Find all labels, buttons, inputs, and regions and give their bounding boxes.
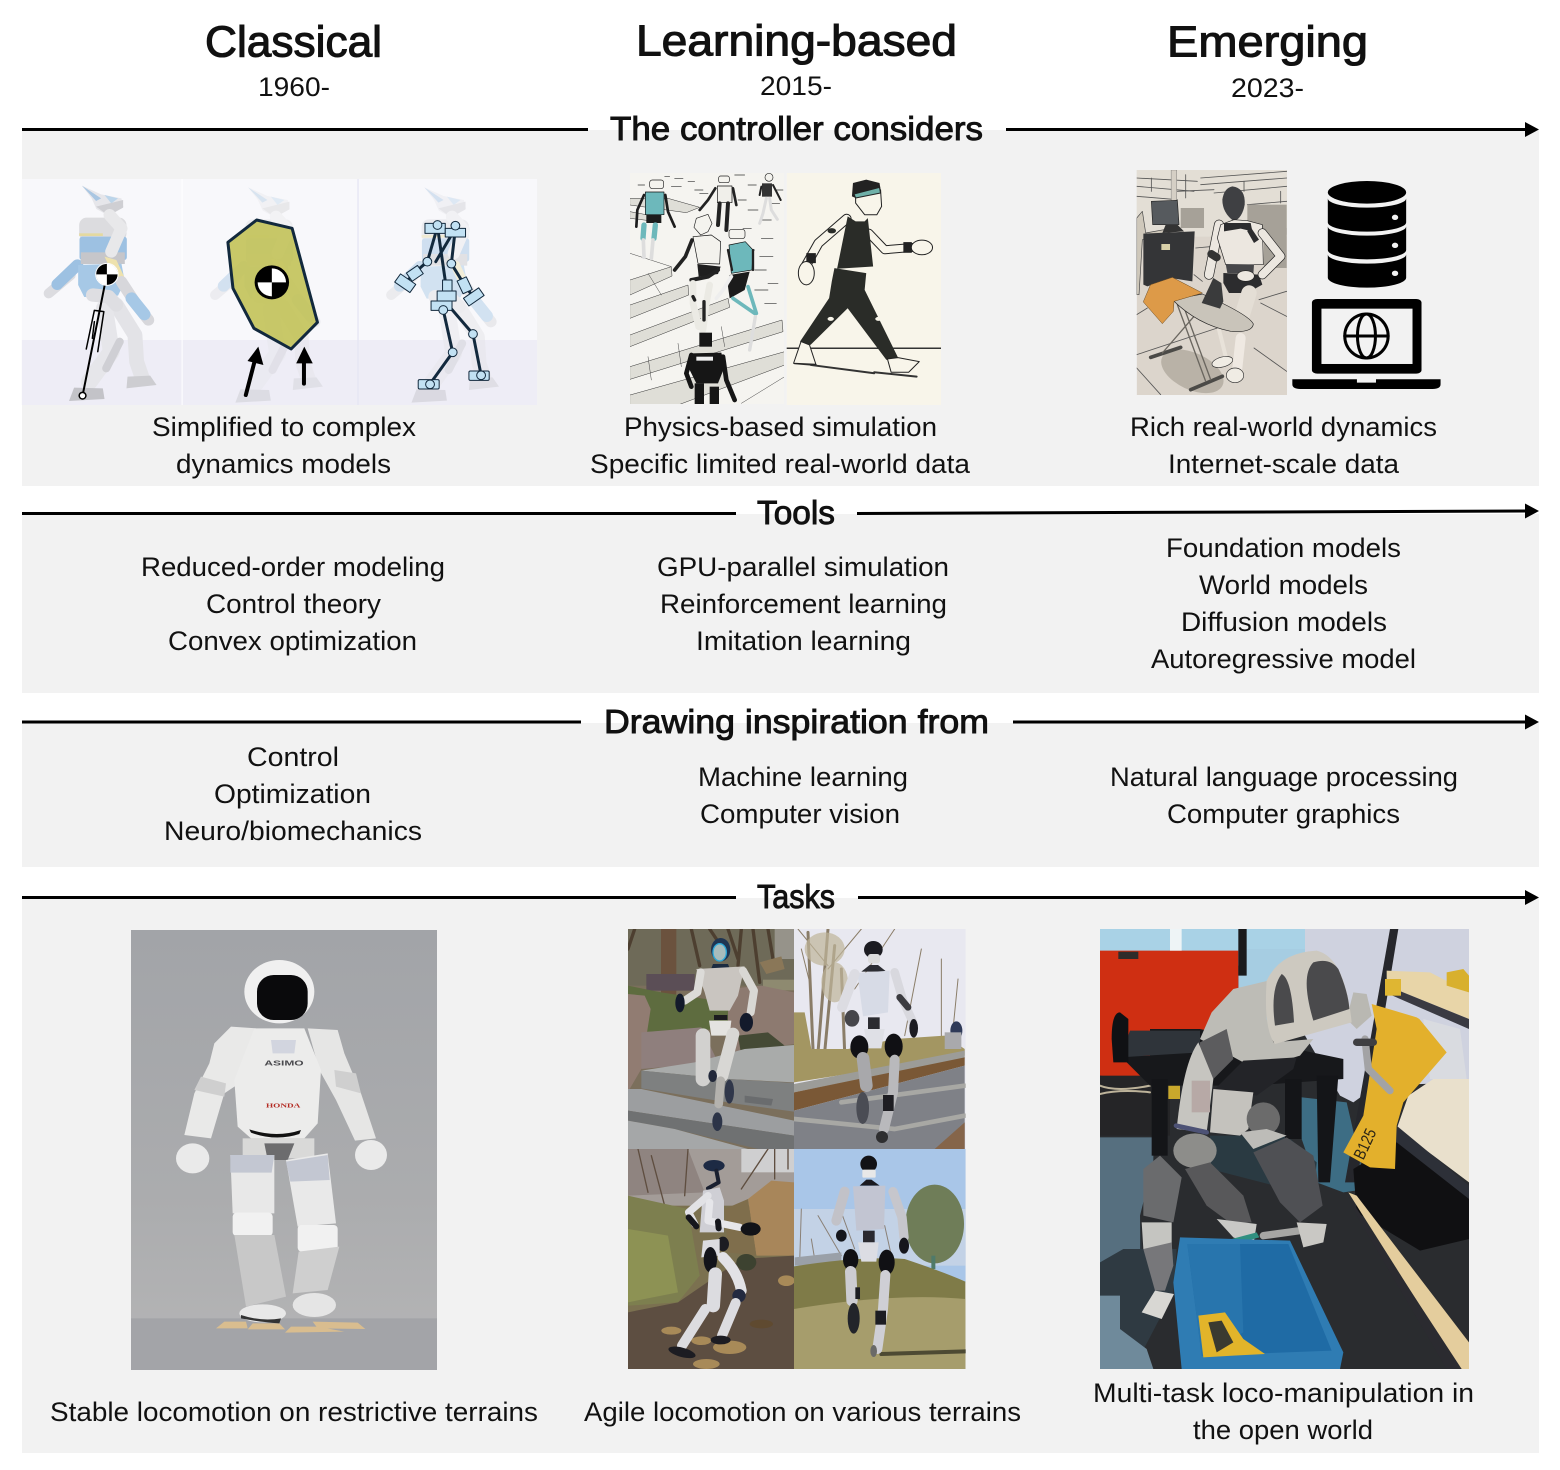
column heading: Classical [205, 18, 382, 102]
caption: multi-task loco-manipulation: the open world [1193, 1415, 1373, 1445]
caption: agile locomotion: Agile locomotion on various terrains [584, 1397, 1021, 1427]
column heading: Emerging: Emerging [1167, 18, 1368, 66]
model: whole-body dynamics [391, 187, 499, 403]
column heading: Learning-based: Learning-based [636, 16, 957, 66]
text block: classical inspiration: Neuro/biomechanics [164, 816, 422, 846]
text block: learning-based tools: Reinforcement learning [660, 589, 947, 619]
text block: learning-based tools [657, 552, 949, 656]
column heading: Learning-based: 2015- [760, 71, 832, 101]
column heading: Classical: 1960- [258, 72, 330, 102]
text block: learning-based inspiration: Machine learning [698, 762, 908, 792]
caption: simplified to complex dynamics models: Simplified to complex [152, 412, 417, 442]
timeline arrow: tasks [22, 890, 1539, 905]
text block: learning-based inspiration [698, 762, 908, 829]
panel: the controller considers [22, 130, 1539, 486]
column heading: Learning-based [636, 16, 957, 101]
model: inverted pendulum [49, 186, 157, 401]
photo: ASIMO robot: ASIMO [264, 1058, 304, 1067]
icon: database [1328, 181, 1406, 288]
robot: teal upper left [636, 180, 675, 258]
text block: classical tools [141, 552, 445, 656]
section heading: Drawing inspiration from: Drawing inspiration from [604, 703, 989, 740]
caption: multi-task loco-manipulation [1093, 1378, 1474, 1445]
text block: emerging inspiration: Natural language processing [1110, 762, 1458, 792]
photo: robot running through reeds [628, 1149, 794, 1369]
text block: learning-based tools: Imitation learning [696, 626, 911, 656]
caption: physics-based simulation: Specific limited real-world data [590, 449, 971, 479]
timeline arrow: drawing inspiration [22, 714, 1539, 730]
text block: emerging inspiration [1110, 762, 1458, 829]
text block: emerging tools [1151, 533, 1416, 674]
section heading: Tools: Tools [757, 494, 835, 531]
text block: classical tools: Reduced-order modeling [141, 552, 445, 582]
text block: emerging tools: Foundation models [1166, 533, 1401, 563]
photo: robot running on grassy hill [794, 1149, 966, 1369]
caption: stable locomotion: Stable locomotion on restrictive terrains [50, 1397, 538, 1427]
robot: black foreground [686, 333, 735, 405]
timeline arrow: tools [22, 504, 1539, 518]
caption: physics-based simulation: Physics-based simulation [624, 412, 937, 442]
text block: learning-based inspiration: Computer vision [700, 799, 900, 829]
robot: central white [675, 214, 721, 330]
text block: learning-based tools: GPU-parallel simulation [657, 552, 949, 582]
caption: rich real-world dynamics: Internet-scale data [1168, 449, 1400, 479]
robot: central teal [716, 229, 756, 350]
panel: tasks [22, 898, 1539, 1453]
caption: rich real-world dynamics [1130, 412, 1437, 479]
column heading: Emerging [1167, 18, 1368, 103]
text block: classical inspiration [164, 742, 422, 846]
section heading: Tasks: Tasks [757, 878, 835, 915]
caption: simplified to complex dynamics models [152, 412, 417, 479]
text block: classical tools: Convex optimization [168, 626, 417, 656]
caption: simplified to complex dynamics models: dynamics models [176, 449, 391, 479]
photo: robot descending stone steps [628, 929, 794, 1149]
text block: classical inspiration: Optimization [214, 779, 371, 809]
photo: robot manipulating parts into a bin: B125 [1350, 1126, 1380, 1162]
photo: ASIMO robot [131, 930, 437, 1370]
timeline arrow: the controller considers [22, 122, 1539, 137]
column heading: Emerging: 2023- [1231, 73, 1304, 103]
text block: classical inspiration: Control [247, 742, 339, 772]
text block: emerging tools: World models [1199, 570, 1368, 600]
figure: simplified to complex robot models [22, 179, 537, 405]
text block: emerging tools: Diffusion models [1181, 607, 1387, 637]
photo: robot manipulating parts into a bin [1100, 929, 1469, 1369]
text block: emerging tools: Autoregressive model [1151, 644, 1416, 674]
panel: tools [22, 514, 1539, 693]
illustration: human motion capture figure [786, 180, 941, 378]
column heading: Classical: Classical [205, 18, 382, 66]
photo: ASIMO robot: HONDA [266, 1103, 301, 1110]
illustration: humanoid ironing clothes in a real-world environment [1136, 170, 1287, 395]
illustration: humanoid robots walking on stairs (simulation) [630, 173, 784, 404]
robot: upper middle [700, 176, 736, 230]
text block: classical tools: Control theory [206, 589, 382, 619]
robot: upper right [760, 173, 781, 223]
icon: laptop with globe [1292, 299, 1441, 389]
section heading: The controller considers: The controller considers [610, 110, 983, 147]
photo: robot walking on railway gravel [794, 929, 966, 1149]
text block: emerging inspiration: Computer graphics [1167, 799, 1400, 829]
panel: drawing inspiration from [22, 723, 1539, 867]
caption: multi-task loco-manipulation: Multi-task loco-manipulation in [1093, 1378, 1474, 1408]
caption: rich real-world dynamics: Rich real-world dynamics [1130, 412, 1437, 442]
caption: physics-based simulation [590, 412, 971, 479]
model: centroidal dynamics [215, 187, 323, 403]
